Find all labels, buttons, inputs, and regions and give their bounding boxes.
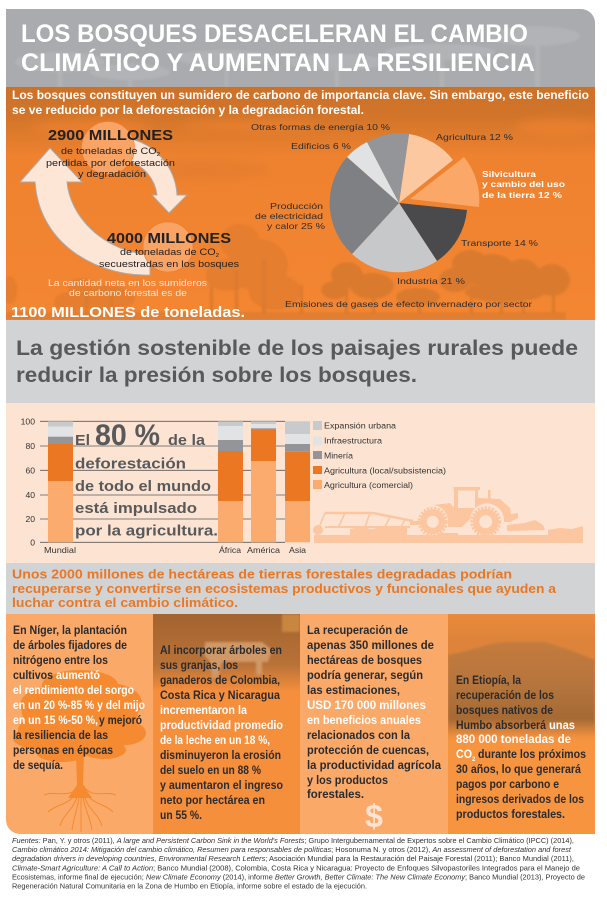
text: restoration benefits: la productividad agrícola — [307, 759, 442, 772]
text: Ethiopia: Humbo absorberá — [456, 719, 546, 732]
bar chart: drivers of deforestation: 20 — [25, 514, 35, 524]
bar chart: drivers of deforestation: 100 — [21, 416, 35, 426]
arrow: losses arrow — [125, 138, 187, 213]
pie label: forestry highlighted: Silvicultura — [482, 169, 536, 179]
text: restoration benefits: forestales. — [307, 788, 364, 801]
text: sources: Regeneración Natural Comunitaria en la Zona de Humbo en Etiopía, informe sobre el estado de la ejecución. — [12, 882, 367, 890]
icon: circle behind carbon losses — [82, 122, 134, 174]
subtitle — [12, 88, 589, 117]
bar chart: drivers of deforestation: Asia — [289, 545, 306, 555]
text: net carbon sink: La cantidad neta en los sumideros — [48, 278, 208, 288]
statement text: Unos 2000 millones de hectáreas de tierras forestales degradadas podrían — [12, 566, 512, 582]
panel: sustainable landscapes heading — [6, 320, 595, 403]
text: restoration benefits — [307, 624, 442, 801]
title — [21, 20, 535, 77]
text: Colombia, Costa Rica, Nicaragua: sus granjas, los — [160, 659, 238, 672]
panel: degraded lands restoration statement — [6, 563, 595, 614]
pie label: forestry highlighted: de la tierra 12 % — [482, 190, 563, 200]
text: restoration benefits: apenas 350 millones de — [307, 639, 435, 652]
panel: deforestation drivers — [6, 403, 595, 563]
text: Niger: de árboles fijadores de — [13, 639, 127, 652]
legend — [313, 420, 446, 490]
text: Niger: cultivos — [13, 669, 53, 682]
text: carbon losses: y degradación — [78, 169, 146, 179]
callout: 80 percent: de la — [168, 432, 206, 449]
text: Colombia, Costa Rica, Nicaragua: neto por hectárea en — [160, 794, 265, 807]
bar chart: drivers of deforestation: 60 — [25, 466, 35, 476]
text: restoration benefits: y los productos — [307, 774, 388, 787]
text: Niger: de sequía. — [13, 759, 63, 772]
pie label: forestry highlighted: y cambio del uso — [482, 179, 565, 189]
text: Niger: en un 20 %-85 % y del mijo — [13, 699, 145, 712]
pie labels — [251, 122, 538, 309]
bar chart: drivers of deforestation — [21, 416, 310, 555]
text: sources — [12, 836, 585, 890]
photo: Humbo landscape — [448, 614, 595, 742]
text: restoration benefits: en beneficios anuales — [307, 714, 421, 727]
icon: tree with roots — [13, 670, 146, 832]
text: Niger: la resiliencia de las — [13, 729, 108, 742]
icon: circle behind carbon sequestered — [143, 222, 193, 272]
bar chart: drivers of deforestation: 40 — [25, 490, 35, 500]
text: Ethiopia: productos forestales. — [456, 808, 565, 821]
text: Colombia, Costa Rica, Nicaragua — [160, 644, 283, 822]
text: Ethiopia: 2 — [472, 757, 476, 763]
text: carbon sequestered: 4000 MILLONES — [107, 230, 231, 247]
legend: Agricultura (local/subsistencia) — [324, 466, 446, 476]
text: Niger: en un 15 %-50 %, — [13, 714, 98, 727]
icon: dollar sign: $ — [365, 798, 383, 834]
bar chart: drivers of deforestation: Mundial — [44, 545, 76, 555]
text: sources: Fuentes: Pan, Y. y otros (2011), A large and Persistent Carbon Sink in the World's Forests; Grupo Intergubernamental de Expertos sobre el Cambio Climático (IPCC) (2014), — [12, 836, 574, 845]
bar chart: drivers of deforestation: América — [247, 545, 280, 555]
text: net carbon sink: de carbono forestal es de — [69, 288, 187, 298]
text: Colombia, Costa Rica, Nicaragua: Costa Rica y Nicaragua — [160, 689, 281, 702]
callout: 80 percent: por la agricultura. — [75, 522, 218, 540]
text: carbon losses: de toneladas de CO — [61, 146, 139, 156]
text: sources: Climate-Smart Agriculture: A Call to Action ; Banco Mundial (2008), Colombia, Costa Rica y Nicaragua: Proyecto de Enfoques Silvopastoriles Integrados para el Manejo de — [12, 864, 580, 872]
text: Niger: En Níger, la plantación — [13, 624, 127, 637]
text: restoration benefits: podría generar, según — [307, 669, 423, 682]
panel: title header — [6, 9, 595, 88]
text: Niger: nitrógeno entre los — [13, 654, 108, 667]
text: Colombia, Costa Rica, Nicaragua: productividad promedio — [160, 719, 283, 732]
text: Ethiopia: 30 años, lo que generará — [456, 763, 581, 776]
panel: Niger — [6, 614, 153, 834]
text: carbon sequestered: 2 — [216, 253, 219, 259]
pie labels: de electricidad — [255, 211, 323, 221]
statement text: luchar contra el cambio climático. — [12, 595, 238, 610]
callout: 80 percent — [75, 419, 218, 540]
text: sources: Ecosistemas, informe final de ejecución; New Climate Economy (2014), informe Better Growth, Better Climate: The New Climate Economy; Banco Mundial (2013), Proyecto de — [12, 872, 585, 882]
text: restoration benefits: relacionados con la — [307, 729, 411, 742]
text: carbon sequestered: secuestradas en los bosques — [99, 259, 240, 269]
text: carbon losses: 2 — [157, 152, 160, 158]
text: Ethiopia: bosques nativos de — [456, 704, 553, 717]
text: carbon losses — [46, 127, 175, 179]
legend: Expansión urbana — [324, 420, 396, 430]
text: sources: degradation drivers in developing countries, Environmental Research Letters ; Asociación Mundial para la Restauración del Paisaje Forestal (2011); Banco Mundial (2011), — [12, 854, 574, 863]
pie labels: Agricultura 12 % — [436, 132, 513, 142]
text: Niger: aumentó — [56, 669, 100, 682]
subtitle: se ve reducido por la deforestación y la degradación forestal. — [12, 103, 364, 117]
callout: 80 percent: El — [75, 432, 90, 449]
bar chart: drivers of deforestation: 80 — [25, 441, 35, 451]
text: Niger: personas en épocas — [13, 744, 113, 757]
text: restoration benefits: USD 170 000 millones — [307, 699, 426, 712]
text: Colombia, Costa Rica, Nicaragua: y aumentaron el ingreso — [160, 779, 283, 792]
text: Colombia, Costa Rica, Nicaragua: Al incorporar árboles en — [160, 644, 282, 657]
text: net carbon sink: 1100 MILLONES de toneladas. — [11, 304, 245, 321]
text: carbon sequestered: de toneladas de CO — [120, 247, 198, 257]
legend: Infraestructura — [324, 436, 382, 446]
pie label: forestry highlighted — [482, 169, 565, 200]
callout: 80 percent: deforestación — [75, 456, 186, 472]
legend: Agricultura (comercial) — [324, 480, 413, 490]
pie labels: Industria 21 % — [397, 276, 465, 286]
text: Niger: y mejoró — [99, 714, 142, 727]
title: CLIMÁTICO Y AUMENTAN LA RESILIENCIA — [21, 48, 535, 77]
arrow: sequestration arrow — [20, 148, 150, 275]
heading — [16, 337, 578, 387]
text: restoration benefits: las estimaciones, — [307, 684, 400, 697]
legend: Minería — [324, 450, 353, 460]
text: Ethiopia: recuperación de los — [456, 689, 554, 702]
text: Ethiopia: 880 000 toneladas de — [456, 733, 572, 746]
panel: Ethiopia — [448, 614, 595, 834]
statement text — [12, 566, 557, 610]
pie chart: greenhouse gas emissions by sector — [330, 133, 479, 272]
pie labels: y calor 25 % — [267, 221, 325, 231]
panel: restoration benefits — [300, 614, 448, 834]
text: restoration benefits: hectáreas de bosques — [307, 654, 422, 667]
text: Colombia, Costa Rica, Nicaragua: disminuyeron la erosión — [160, 749, 281, 762]
text: restoration benefits: La recuperación de — [307, 624, 409, 637]
pie labels: Producción — [270, 201, 323, 211]
panel: carbon sink and emissions — [3, 87, 605, 321]
text: Ethiopia: durante los próximos — [478, 748, 586, 761]
text: net carbon sink — [11, 278, 245, 321]
text: Ethiopia: En Etiopía, la — [456, 674, 521, 687]
bar chart: drivers of deforestation: 0 — [30, 538, 35, 548]
text: Colombia, Costa Rica, Nicaragua: incrementaron la — [160, 704, 248, 717]
heading: La gestión sostenible de los paisajes rurales puede — [16, 337, 578, 360]
text: Colombia, Costa Rica, Nicaragua: de la leche en un 18 %, — [160, 734, 270, 747]
panel: Colombia, Costa Rica, Nicaragua — [153, 614, 300, 834]
text: Colombia, Costa Rica, Nicaragua: del suelo en un 88 % — [160, 764, 261, 777]
callout: 80 percent: 80 % — [95, 419, 160, 452]
statement text: recuperarse y convertirse en ecosistemas productivos y funcionales que ayuden a — [12, 581, 557, 596]
callout: 80 percent: está impulsado — [75, 500, 197, 517]
text: Ethiopia: ingresos derivados de los — [456, 793, 584, 806]
icon: tractor — [313, 487, 583, 543]
text: Colombia, Costa Rica, Nicaragua: ganaderos de Colombia, — [160, 674, 280, 687]
text: restoration benefits: protección de cuencas, — [307, 744, 429, 757]
text: Colombia, Costa Rica, Nicaragua: un 55 %. — [160, 809, 202, 822]
text: Ethiopia: pagos por carbono e — [456, 778, 559, 791]
photo: cattle — [153, 614, 300, 692]
text: Niger: el rendimiento del sorgo — [13, 684, 134, 697]
text: carbon losses: perdidas por deforestación — [46, 158, 175, 168]
pie labels: Transporte 14 % — [461, 238, 538, 248]
callout: 80 percent: de todo el mundo — [75, 478, 211, 495]
text: sources: Cambio climático 2014: Mitigación del cambio climático, Resumen para responsables de políticas; Hosonuma N. y otros (2012), An assessment of deforestation and forest — [12, 845, 572, 854]
pie labels: Edificios 6 % — [291, 141, 351, 151]
text: carbon sequestered — [99, 230, 240, 269]
text: Ethiopia: unas — [549, 719, 575, 732]
text: Niger — [13, 624, 145, 772]
pie labels: Emisiones de gases de efecto invernadero por sector — [285, 299, 532, 309]
subtitle: Los bosques constituyen un sumidero de carbono de importancia clave. Sin embargo, este beneficio — [12, 88, 589, 102]
title: LOS BOSQUES DESACELERAN EL CAMBIO — [21, 20, 528, 48]
bar chart: drivers of deforestation: África — [219, 545, 241, 555]
heading: reducir la presión sobre los bosques. — [16, 364, 417, 387]
pie labels: Otras formas de energía 10 % — [251, 122, 390, 132]
text: Ethiopia — [456, 674, 586, 821]
text: Ethiopia: CO — [456, 748, 472, 761]
text: carbon losses: 2900 MILLONES — [48, 127, 173, 144]
